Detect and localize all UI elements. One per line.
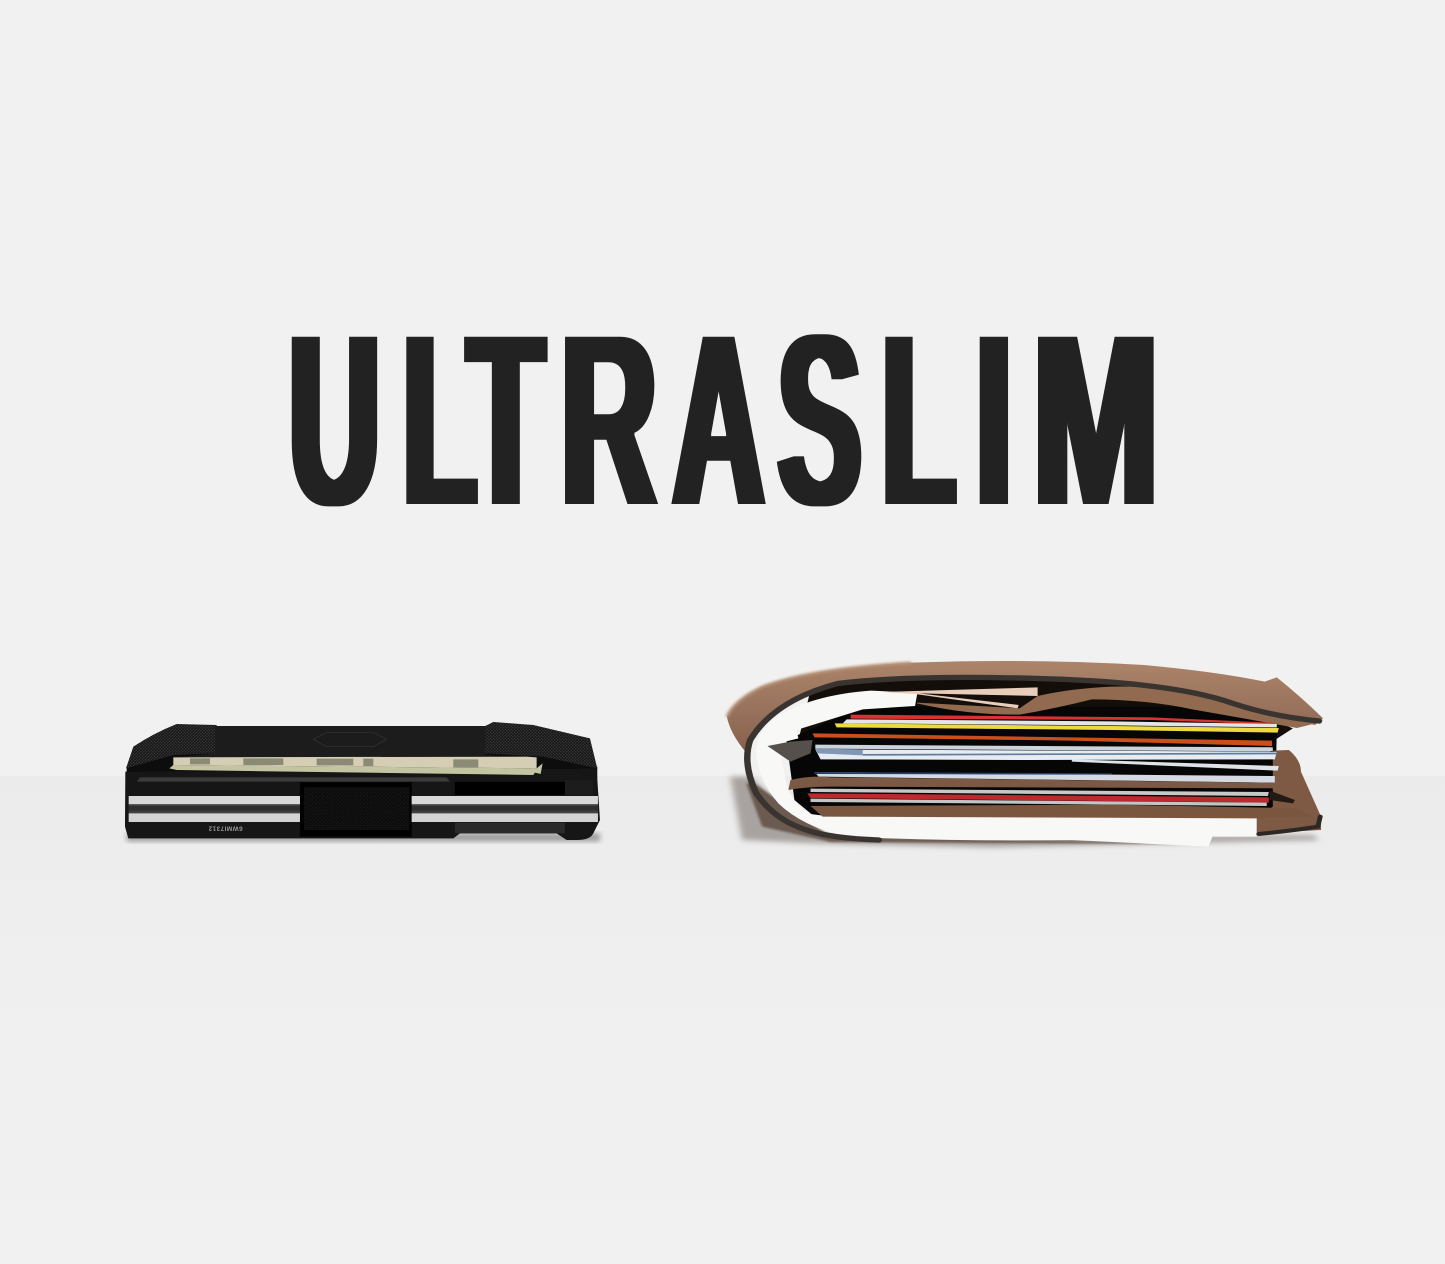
title: ULTRASLIM: S [778, 283, 861, 558]
wallet shadow [730, 777, 1319, 847]
dark backing behind bands [127, 753, 597, 778]
folded tan paper [883, 687, 1038, 708]
background wall [0, 0, 1445, 776]
title: ULTRASLIM: U [289, 283, 380, 558]
middle leather strip [788, 777, 1275, 790]
title: ULTRASLIM [289, 282, 1159, 558]
title: ULTRASLIM: I [976, 284, 1012, 558]
wallet shadow [127, 833, 600, 841]
dark recess in right side [1270, 791, 1295, 803]
title: ULTRASLIM: R [561, 282, 657, 557]
leather left highlights [727, 663, 911, 717]
left elastic band [126, 724, 217, 768]
dark corner edge [1259, 817, 1320, 834]
top edge highlight [137, 777, 450, 782]
interior dark cavity [786, 707, 1277, 817]
lower cards [807, 789, 1269, 806]
folded banknote [169, 757, 543, 775]
outer leather cover [727, 661, 1323, 752]
stuffed leather wallet [727, 661, 1323, 847]
metal body [125, 768, 600, 840]
dark upper pocket [798, 677, 1293, 740]
dark flap edge [747, 677, 1319, 840]
table surface [0, 776, 1445, 1264]
dark bottom shadow [746, 783, 1212, 844]
title: ULTRASLIM: T [468, 283, 544, 558]
slim metal wallet [125, 722, 600, 841]
right elastic band [484, 722, 597, 768]
credit cards stack [813, 715, 1279, 783]
centre elastic strap [300, 782, 412, 837]
title: ULTRASLIM: A [673, 284, 764, 558]
recessed window [455, 782, 565, 795]
silver card stripes [129, 796, 598, 822]
inner leather flap [917, 687, 1313, 728]
title: ULTRASLIM: M [1033, 283, 1159, 558]
title: ULTRASLIM: L [403, 284, 477, 558]
white paper receipt [756, 691, 1257, 847]
serial number: 6WMI7312 [208, 824, 243, 831]
metal clip [767, 740, 813, 762]
title: ULTRASLIM: L [882, 284, 956, 558]
top black plate [173, 726, 523, 757]
bottom leather strip [810, 805, 1313, 818]
right lower leather side [1257, 750, 1321, 833]
